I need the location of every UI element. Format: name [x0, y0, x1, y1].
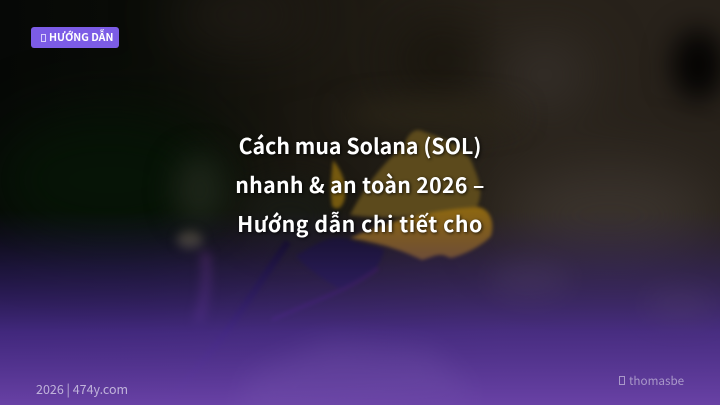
author name: thomasbe [629, 372, 684, 389]
title [235, 130, 485, 240]
footer: year and site: 2026 | 474y.com [36, 379, 128, 398]
badge text: HƯỚNG DẪN [49, 30, 113, 45]
title: nhanh & an toàn 2026 – [235, 169, 485, 200]
title: Cách mua Solana (SOL) [239, 130, 481, 161]
icon: missing-glyph box [41, 34, 46, 42]
flower [165, 130, 492, 405]
badge: guide label [31, 27, 119, 48]
icon: missing-glyph box [619, 376, 625, 385]
footer: author [619, 372, 684, 389]
title: Hướng dẫn chi tiết cho [237, 208, 483, 239]
